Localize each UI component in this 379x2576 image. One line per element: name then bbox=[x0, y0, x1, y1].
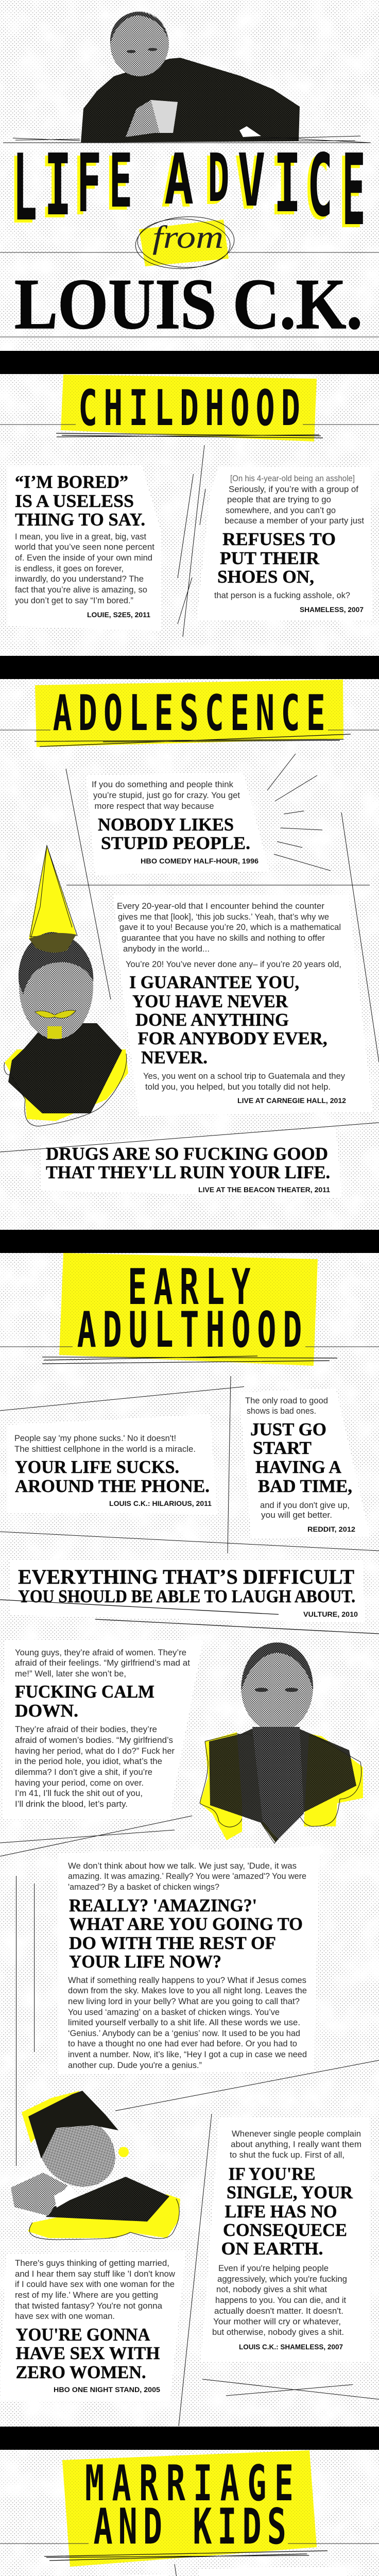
quote intro: gave it to you! Because you’re 20, which is a mathematical bbox=[119, 923, 341, 932]
heading banner: Childhood bbox=[0, 351, 379, 442]
source: LIVE AT CARNEGIE HALL, 2012 bbox=[237, 1096, 346, 1105]
panel: have a kid quote bbox=[7, 2574, 179, 2576]
quote ending: actually doesn't matter. It doesn't. bbox=[214, 2307, 343, 2316]
illustration: man resting his head on his arm bbox=[11, 2091, 180, 2240]
quote headline: NEVER. bbox=[141, 1047, 208, 1067]
quote intro bbox=[230, 2129, 361, 2160]
quote headline: YOUR LIFE SUCKS. bbox=[15, 1457, 179, 1477]
quote headline: DOWN. bbox=[15, 1701, 78, 1721]
quote headline: DO WITH THE REST OF bbox=[69, 1933, 276, 1953]
quote headline: BAD TIME, bbox=[258, 1476, 352, 1496]
quote body: inwardly, do you understand? The bbox=[15, 574, 144, 584]
quote intro bbox=[15, 1648, 190, 1679]
quote ending: but otherwise, nobody gives a shit. bbox=[212, 2328, 344, 2337]
quote intro: If you do something and people think bbox=[92, 780, 234, 789]
quote ending: afraid of women’s bodies. “My girlfriend’s bbox=[15, 1736, 173, 1745]
quote headline: CONSEQUECE bbox=[223, 2220, 347, 2240]
quote intro: You’re 20! You’ve never done any– if you’re 20 years old, bbox=[126, 960, 341, 969]
quote intro: anybody in the world... bbox=[123, 944, 210, 954]
quote intro: if I could have sex with one woman for the bbox=[15, 2280, 175, 2289]
quote intro: People say 'my phone sucks.' No it doesn't! bbox=[14, 1434, 176, 1443]
quote intro: amazing. It was amazing.’ Really? You were 'amazed'? You were bbox=[68, 1872, 306, 1881]
quote headline: LIFE HAS NO bbox=[225, 2201, 337, 2222]
quote headline bbox=[69, 1895, 303, 1972]
panel: boring quote bbox=[198, 2567, 370, 2576]
section: marriage and kids bbox=[0, 2427, 379, 2576]
quote ending: What if something really happens to you? What if Jesus comes bbox=[68, 1976, 306, 1985]
quote headline: YOU HAVE NEVER bbox=[132, 991, 288, 1011]
quote ending: told you, you helped, but you totally did not help. bbox=[145, 1082, 331, 1092]
quote ending: I’m 41, I’ll fuck the shit out of you, bbox=[15, 1789, 143, 1798]
quote ending bbox=[212, 2264, 347, 2337]
title: LIFE ADVICE: E bbox=[109, 138, 132, 225]
quote intro bbox=[14, 1434, 196, 1454]
quote intro bbox=[225, 474, 364, 526]
panel: nobody likes stupid people bbox=[86, 772, 269, 875]
source: REDDIT, 2012 bbox=[307, 1525, 355, 1533]
quote headline: SHOES ON, bbox=[217, 567, 314, 587]
quote body bbox=[14, 532, 154, 605]
quote ending: dilemma? I don’t give a shit, if you’re bbox=[15, 1768, 152, 1777]
quote headline bbox=[98, 815, 250, 853]
quote headline: REALLY? 'AMAZING?' bbox=[69, 1895, 257, 1916]
quote intro: We don’t think about how we talk. We just say, 'Dude, it was bbox=[68, 1861, 297, 1871]
quote intro: gives me that [look], ‘this job sucks.’ Yeah, that’s why we bbox=[118, 912, 329, 922]
quote ending: in the period hole, you idiot, what’s the bbox=[15, 1757, 162, 1766]
illustration: smiling young man with tie bbox=[200, 1642, 363, 1843]
quote headline bbox=[15, 1457, 210, 1496]
quote ending: Yes, you went on a school trip to Guatemala and they bbox=[143, 1072, 346, 1081]
quote headline: AROUND THE PHONE. bbox=[15, 1476, 210, 1496]
quote headline: THAT THEY'LL RUIN YOUR LIFE. bbox=[46, 1162, 330, 1182]
quote headline bbox=[129, 972, 328, 1067]
title: LIFE ADVICE: F bbox=[77, 137, 101, 231]
panel: difficult quote bbox=[10, 1560, 365, 1623]
quote ending: aggressively, which you're fucking bbox=[217, 2275, 347, 2284]
source: LOUIE, S2E5, 2011 bbox=[87, 611, 150, 619]
scribbled rule under photo bbox=[3, 136, 371, 143]
panel: shoes quote bbox=[197, 466, 372, 620]
quote headline: IF YOU'RE bbox=[229, 2164, 315, 2184]
source: LIVE AT THE BEACON THEATER, 2011 bbox=[198, 1185, 330, 1194]
source: LOUIS C.K.: SHAMELESS, 2007 bbox=[239, 2343, 343, 2351]
quote ending: new living lord in your belly? What are you going to call that? bbox=[68, 1997, 300, 2006]
source: HBO COMEDY HALF-HOUR, 1996 bbox=[141, 857, 259, 865]
quote headline: NOBODY LIKES bbox=[98, 815, 234, 835]
quote intro bbox=[15, 2259, 175, 2321]
heading banner: Childhood: CHILDHOOD bbox=[78, 380, 300, 437]
quote headline bbox=[15, 2325, 160, 2382]
quote headline: WHAT ARE YOU GOING TO bbox=[69, 1914, 303, 1934]
quote ending: and if you don't give up, bbox=[260, 1501, 350, 1510]
panel: phone quote bbox=[7, 1414, 217, 1514]
section: early adulthood bbox=[0, 1230, 379, 2166]
quote ending: another cup. Dude you're a genius.” bbox=[68, 2061, 202, 2070]
panel: single quote bbox=[201, 2118, 370, 2362]
quote headline: HAVING A bbox=[255, 1457, 342, 1477]
quote ending: having her period, what do I do?” Fuck her bbox=[15, 1747, 175, 1756]
panel: bad time quote bbox=[239, 1388, 370, 1538]
quote headline: ON EARTH. bbox=[221, 2239, 323, 2259]
panel: never done anything bbox=[113, 894, 373, 1115]
heading banner: Marriage and Kids: MARRIAGE bbox=[85, 2455, 294, 2512]
quote headline: IS A USELESS bbox=[15, 491, 134, 511]
title: LIFE ADVICE: I bbox=[44, 137, 72, 235]
quote body: world that you’ve seen none percent bbox=[14, 543, 154, 552]
quote ending: They’re afraid of their bodies, they’re bbox=[15, 1725, 157, 1734]
quote intro: [On his 4-year-old being an asshole] bbox=[230, 474, 355, 483]
quote headline: STUPID PEOPLE. bbox=[101, 833, 250, 853]
quote intro: Whenever single people complain bbox=[232, 2129, 361, 2139]
panel: drugs quote bbox=[41, 1128, 342, 1197]
heading banner: Adolescence bbox=[0, 656, 379, 747]
quote intro: somewhere, and you can’t go bbox=[226, 506, 336, 515]
quote body: you don’t get to say “I’m bored.” bbox=[15, 596, 133, 605]
quote intro: to shut the fuck up. First of all, bbox=[230, 2150, 344, 2160]
quote headline: JUST GO bbox=[250, 1419, 326, 1439]
quote ending: you will get better. bbox=[261, 1511, 332, 1520]
quote ending: not, nobody gives a shit what bbox=[216, 2285, 327, 2294]
title: LIFE ADVICE: D bbox=[208, 140, 230, 217]
quote intro: that twisted fantasy? You're not gonna bbox=[15, 2301, 163, 2311]
quote headline bbox=[46, 1144, 330, 1182]
quote intro: Young guys, they’re afraid of women. They’re bbox=[15, 1648, 186, 1657]
quote ending bbox=[68, 1976, 307, 2070]
quote ending: Even if you're helping people bbox=[218, 2264, 329, 2273]
heading banner: Early Adulthood bbox=[0, 1230, 379, 1366]
heading banner: Marriage and Kids bbox=[0, 2427, 379, 2567]
quote intro: more respect that way because bbox=[95, 802, 214, 811]
quote intro: have sex with one woman. bbox=[15, 2312, 115, 2321]
quote headline: YOUR LIFE NOW? bbox=[69, 1952, 221, 1972]
panel: I'm bored quote bbox=[7, 465, 161, 631]
quote headline: FOR ANYBODY EVER, bbox=[138, 1028, 328, 1048]
quote ending: having your period, come on over. bbox=[15, 1778, 144, 1788]
quote headline: EVERYTHING THAT’S DIFFICULT bbox=[18, 1565, 354, 1588]
quote intro bbox=[92, 780, 240, 811]
rule behind from badge bbox=[0, 252, 379, 253]
illustration: young man with party hat and mustache bbox=[4, 845, 128, 1126]
quote headline: DRUGS ARE SO FUCKING GOOD bbox=[46, 1144, 328, 1164]
quote headline: SINGLE, YOUR bbox=[227, 2182, 353, 2202]
source: VULTURE, 2010 bbox=[303, 1610, 358, 1618]
quote intro: There's guys thinking of getting married, bbox=[15, 2259, 169, 2268]
quote headline: FUCKING CALM bbox=[15, 1682, 154, 1702]
source: SHAMELESS, 2007 bbox=[300, 605, 364, 614]
quote intro: Every 20-year-old that I encounter behind the counter bbox=[117, 902, 325, 911]
quote intro: about anything, I really want them bbox=[231, 2140, 361, 2149]
quote intro: because a member of your party just bbox=[225, 516, 364, 526]
title: LIFE ADVICE: C bbox=[307, 136, 333, 236]
title: LIFE ADVICE: L bbox=[13, 134, 37, 242]
quote intro: me!” Well, later she won’t be, bbox=[15, 1669, 126, 1679]
quote headline bbox=[15, 472, 145, 530]
illustration: Louis C.K. with a coffee cup bbox=[81, 11, 300, 143]
heading banner: Early Adulthood: EARLY bbox=[128, 1259, 251, 1316]
quote ending: limited yourself verbally to a shit life. All these words we use. bbox=[68, 2018, 300, 2027]
title: LIFE ADVICE: A bbox=[164, 139, 194, 220]
quote intro: people that are trying to go bbox=[227, 495, 331, 504]
source: LOUIS C.K.: HILARIOUS, 2011 bbox=[109, 1499, 212, 1507]
quote ending: ‘Genius.’ Anybody can be a ‘genius’ now. It used to be you had bbox=[68, 2029, 300, 2038]
quote body: is endless, it goes on forever, bbox=[15, 564, 124, 573]
title: LIFE ADVICE bbox=[13, 133, 366, 248]
quote intro: you’re stupid, just go for crazy. You get bbox=[93, 791, 240, 800]
quote headline: DONE ANYTHING bbox=[135, 1010, 289, 1030]
quote headline: “I’M BORED” bbox=[15, 472, 128, 492]
panel: amazing quote bbox=[58, 1846, 319, 2075]
quote intro: rest of my life.' Where are you getting bbox=[15, 2291, 158, 2300]
quote intro: The only road to good bbox=[245, 1396, 328, 1405]
quote headline: PUT THEIR bbox=[220, 548, 320, 568]
badge: from: from bbox=[152, 220, 223, 255]
heading banner: Marriage and Kids: AND KIDS bbox=[94, 2498, 286, 2555]
quote intro: and I hear them say stuff like 'I don't know bbox=[15, 2269, 175, 2279]
section: childhood bbox=[0, 351, 379, 637]
quote intro: shows is bad ones. bbox=[247, 1406, 316, 1416]
quote intro: The shittiest cellphone in the world is a miracle. bbox=[14, 1445, 196, 1454]
quote headline bbox=[250, 1419, 352, 1496]
quote ending: that person is a fucking asshole, ok? bbox=[214, 591, 350, 600]
quote intro bbox=[68, 1861, 306, 1892]
quote intro: Seriously, if you’re with a group of bbox=[229, 485, 358, 494]
heading banner: Adolescence: ADOLESCENCE bbox=[53, 685, 325, 742]
panel: zero women quote bbox=[0, 2251, 186, 2401]
title: LIFE ADVICE: E bbox=[342, 133, 366, 248]
quote headline: THING TO SAY. bbox=[15, 510, 145, 530]
quote intro bbox=[117, 902, 341, 969]
quote body: fact that you’re alive is amazing, so bbox=[15, 585, 147, 595]
quote ending: down from the sky. Makes love to you all night long. Leaves the bbox=[68, 1986, 307, 1995]
section: title header bbox=[0, 11, 379, 344]
quote body: I mean, you live in a great, big, vast bbox=[15, 532, 146, 541]
quote ending: I’ll drink the blood, let’s party. bbox=[15, 1800, 128, 1809]
quote ending bbox=[143, 1072, 346, 1092]
quote ending bbox=[15, 1725, 175, 1809]
panel: calm down quote bbox=[3, 1640, 203, 1819]
quote ending bbox=[260, 1501, 350, 1520]
title: LIFE ADVICE: V bbox=[237, 138, 266, 223]
quote headline: YOU'RE GONNA bbox=[15, 2325, 150, 2345]
source: HBO ONE NIGHT STAND, 2005 bbox=[54, 2385, 160, 2394]
quote intro: 'amazed'? By a basket of chicken wings? bbox=[68, 1883, 219, 1892]
section: adolescence bbox=[0, 656, 379, 1197]
title: LIFE ADVICE: I bbox=[274, 137, 301, 230]
quote headline: REFUSES TO bbox=[222, 529, 336, 549]
quote headline: I GUARANTEE YOU, bbox=[129, 972, 299, 992]
quote ending: Your mother will cry or whatever, bbox=[213, 2317, 341, 2327]
quote headline bbox=[217, 529, 336, 587]
quote headline bbox=[221, 2164, 353, 2259]
quote ending: invent a number. Now, it’s like, “Hey I got a cup in case we need bbox=[68, 2050, 307, 2059]
quote headline: START bbox=[253, 1438, 312, 1458]
quote ending: happens to you. You can die, and it bbox=[215, 2296, 346, 2305]
quote intro bbox=[245, 1396, 328, 1416]
quote body: of. Even the inside of your own mind bbox=[15, 553, 152, 563]
section: relationships and being single bbox=[0, 2091, 379, 2426]
quote ending: You used ‘amazing’ on a basket of chicken wings. You’ve bbox=[68, 2008, 280, 2017]
quote headline bbox=[18, 1565, 355, 1606]
quote headline bbox=[15, 1682, 154, 1721]
heading banner: Early Adulthood: ADULTHOOD bbox=[77, 1301, 302, 1359]
quote ending: to have a thought no one had ever had before. Or you had to bbox=[68, 2039, 297, 2048]
badge: from bbox=[134, 213, 236, 272]
quote headline: HAVE SEX WITH bbox=[15, 2343, 160, 2363]
quote intro: guarantee that you have no skills and nothing to offer bbox=[122, 934, 325, 943]
quote intro: afraid of their feelings. “My girlfriend’s mad at bbox=[15, 1658, 190, 1668]
quote headline: ZERO WOMEN. bbox=[15, 2362, 146, 2382]
